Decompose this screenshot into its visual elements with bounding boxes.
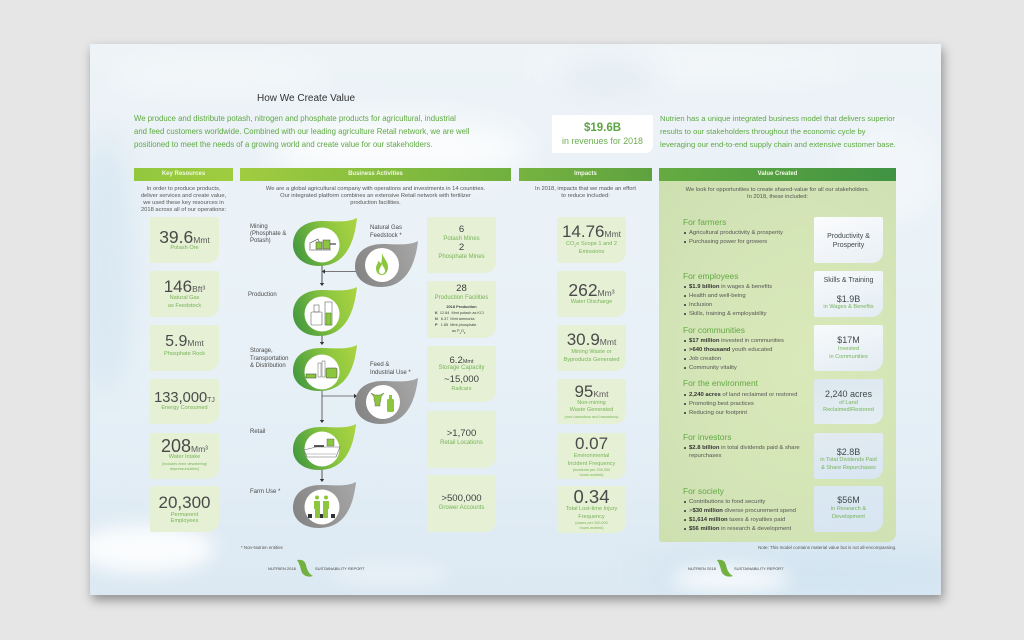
arrow: storage to retail (320, 390, 324, 423)
bullets: employees: Skills, training & employability (689, 311, 767, 317)
footer left leaf (297, 560, 313, 577)
value card: communities: Invested (838, 346, 859, 352)
leaf: feed and industrial use (355, 378, 418, 424)
stat: water discharge: Water Discharge (571, 299, 612, 305)
title: How We Create Value (257, 93, 355, 104)
stat: environmental incident frequency: (incidents per 200,000 (573, 468, 610, 472)
bullets: society: $56 million in research & development (689, 526, 791, 532)
stat: employees: Permanent (171, 512, 198, 518)
stat: injury frequency: (cases per 200,000 (575, 521, 608, 525)
heading: key resources: Key Resources (162, 171, 205, 177)
intro text left: and feed customers worldwide. Combined with our leading agriculture Retail network, we are well (134, 127, 469, 136)
heading: impacts: Impacts (574, 171, 597, 177)
value card: land: 2,240 acres (825, 389, 872, 399)
bullets: communities: Job creation (689, 356, 721, 362)
bullets: society: Contributions to food security (689, 499, 765, 505)
stat: water intake: 208Mm³ (161, 436, 208, 456)
value card: productivity: Productivity & (827, 233, 870, 240)
value card: research: Development (832, 514, 865, 520)
value card: skills and training (814, 271, 883, 317)
stat: storage and railcars (427, 346, 496, 402)
bullets: farmers: Agricultural productivity & prosperity (689, 230, 783, 236)
label: mining (250, 224, 286, 244)
value card: research: in Research & (831, 506, 866, 512)
arrow: mining to production (320, 262, 324, 286)
label: natural gas feedstock: Natural Gas (370, 225, 402, 231)
arrow: natural gas to mining line (322, 269, 358, 274)
value chain flow diagram (293, 218, 418, 528)
value card: land: Reclaimed/Restored (823, 407, 874, 413)
stat: non-mining waste: (non-hazardous and hazardous) (564, 415, 619, 419)
stat: employees (150, 486, 219, 532)
stat: water intake: (includes mine dewatering/ (162, 462, 207, 466)
stat: non-mining waste: Waste Generated (570, 407, 613, 413)
stat: natural gas: Natural Gas (170, 295, 199, 301)
label: storage, transportation and distribution: & Distribution (250, 363, 286, 369)
production breakdown: as P 2O 5 (452, 329, 465, 335)
arrow: storage to feed and industrial use (322, 394, 357, 398)
impacts intro (535, 186, 636, 199)
value card: dividends (814, 433, 883, 479)
production breakdown: N 6.37 Mmt ammonia (435, 317, 474, 321)
stat: water intake: depressurization) (170, 467, 199, 471)
note: model disclaimer: Note: This model contains material value but is not all-encompassing. (758, 545, 896, 550)
stat: grower accounts: >500,000 (441, 493, 482, 504)
label: mining: Mining (250, 224, 268, 230)
label: retail: Retail (250, 429, 265, 435)
stat: mining waste: 30.9Mmt (567, 330, 616, 349)
revenue callout (552, 115, 653, 153)
business activities intro: Our integrated platform combines an extensive Retail network with fertilizer (280, 193, 471, 199)
intro text right: leveraging our end-to-end supply chain and extensive customer base. (660, 140, 896, 149)
heading: for society: For society (683, 486, 724, 496)
bullets: society: >$30 million diverse procurement spend (689, 508, 796, 514)
stat: grower accounts: Grower Accounts (439, 505, 484, 511)
heading: key resources (134, 168, 233, 181)
label: feed and industrial use: Feed & (370, 362, 389, 368)
bullets: communities: Community vitality (689, 365, 737, 371)
key resources intro: In order to produce products, (147, 186, 220, 192)
stat: mines: 6 (459, 224, 464, 235)
stat: storage and railcars: Storage Capacity (438, 365, 485, 371)
stat: injury frequency: hours worked) (579, 526, 604, 530)
leaf: mining (293, 218, 357, 266)
stat: mines: 2 (459, 242, 464, 253)
stat: environmental incident frequency (557, 433, 626, 479)
label: natural gas feedstock (370, 224, 402, 238)
stat: environmental incident frequency: Incident Frequency (568, 461, 615, 467)
production breakdown: K 12.84 Mmt potash as KCl (435, 311, 484, 315)
stat: storage and railcars: 6.2Mmt (449, 355, 474, 366)
label: storage, transportation and distribution: Transportation (250, 356, 288, 362)
stat: injury frequency: 0.34 (573, 486, 610, 507)
value card: skills and training: $1.9B (837, 294, 860, 304)
footer left (268, 560, 365, 577)
bullets: communities: $17 million invested in communities (689, 338, 784, 344)
stat: storage and railcars: Railcars (451, 386, 472, 392)
footnote: non-nutrien entities: * Non-Nutrien entities (241, 545, 283, 550)
key resources intro: deliver services and create value, (141, 193, 226, 199)
value card: research (814, 486, 883, 532)
bullets: communities (684, 338, 784, 371)
value card: communities: $17M (837, 335, 860, 345)
intro text right: results to our stakeholders throughout the economic cycle by (660, 127, 866, 136)
stat: emissions: CO2e Scope 1 and 2 (566, 241, 617, 248)
production breakdown: P 1.85 Mmt phosphate (435, 323, 476, 327)
value card: land (814, 379, 883, 424)
bullets: investors: $2.8 billion in total dividends paid & share (689, 445, 800, 451)
intro text right (660, 114, 896, 149)
footer left report name: SUSTAINABILITY REPORT (315, 566, 365, 571)
value card: communities (814, 325, 883, 371)
value card: dividends: & Share Repurchases (821, 465, 876, 471)
label: feed and industrial use: Industrial Use * (370, 370, 411, 376)
stat: production facilities (427, 281, 496, 338)
label: farm use: Farm Use * (250, 489, 280, 495)
key resources intro: 2018 across all of our operations: (141, 207, 226, 213)
value card: skills and training: in Wages & Benefits (823, 304, 874, 310)
stat: environmental incident frequency: 0.07 (575, 434, 608, 453)
value created intro: In 2018, these included: (747, 194, 808, 200)
heading: value created (659, 168, 896, 181)
key resources intro (141, 186, 226, 213)
value card: communities: in Communities (829, 354, 868, 360)
label: mining: (Phosphate & (250, 231, 286, 237)
arrow: retail to farm use (320, 468, 324, 482)
heading: business activities: Business Activities (348, 171, 403, 177)
stat: potash ore: 39.6Mmt (159, 227, 210, 247)
intro text left (134, 114, 469, 149)
footer right leaf (717, 560, 733, 577)
stat: injury frequency (557, 486, 626, 533)
stat: potash ore (150, 217, 219, 263)
stat: employees: Employees (171, 518, 198, 524)
business activities intro: production facilities. (350, 200, 401, 206)
intro text left: We produce and distribute potash, nitrogen and phosphate products for agricultural, industrial (134, 114, 456, 123)
stat: mining waste (557, 325, 626, 371)
stat: phosphate rock: Phosphate Rock (164, 351, 205, 357)
stat: employees: 20,300 (158, 493, 210, 512)
bullets: farmers: Purchasing power for growers (689, 239, 767, 245)
stat: environmental incident frequency: hours worked) (579, 473, 604, 477)
business activities intro: We are a global agricultural company with operations and investments in 14 countries. (266, 186, 485, 192)
stat: mining waste: Mining Waste or (571, 349, 612, 355)
value card: land: of Land (839, 400, 858, 406)
heading: for farmers: For farmers (683, 217, 726, 227)
stat: energy: 133,000TJ (154, 390, 215, 406)
bullets: farmers (684, 230, 783, 245)
footer right label: NUTRIEN 2018 (688, 566, 716, 571)
page background sheet (90, 44, 941, 595)
stat: phosphate rock: 5.9Mmt (165, 333, 204, 350)
stat: storage and railcars: ~15,000 (444, 374, 479, 385)
leaf: production (293, 287, 357, 336)
heading: for communities: For communities (683, 325, 745, 335)
stat: injury frequency: Frequency (578, 514, 605, 520)
label: natural gas feedstock: Feedstock * (370, 232, 402, 238)
heading: for the environment: For the environment (683, 378, 758, 388)
arrow: production to storage (320, 334, 324, 345)
stat: non-mining waste: 95Kmt (574, 382, 609, 401)
stat: grower accounts (427, 475, 496, 532)
production breakdown (435, 311, 484, 335)
impacts intro: to reduce included: (561, 193, 610, 199)
stat: emissions: 14.76Mmt (562, 222, 621, 241)
stat: energy (150, 379, 219, 424)
business activities intro (266, 186, 485, 206)
label: storage, transportation and distribution: Storage, (250, 348, 273, 354)
heading: impacts (519, 168, 652, 181)
label: mining: Potash) (250, 238, 271, 244)
bullets: employees: $1.9 billion in wages & benefits (689, 284, 772, 290)
stat: natural gas: as Feedstock (168, 303, 201, 309)
value created intro (686, 187, 869, 200)
value card: skills and training: Skills & Training (824, 277, 873, 284)
leaf: farm use (293, 482, 356, 528)
label: feed and industrial use (370, 362, 411, 376)
stat: mines: Phosphate Mines (438, 254, 485, 260)
stat: natural gas (150, 271, 219, 317)
stat: mines: Potash Mines (443, 236, 480, 242)
bullets: investors: repurchases (689, 453, 721, 459)
stat: production facilities: 2018 Production (446, 304, 477, 309)
leaf: natural gas feedstock (355, 241, 418, 287)
panel: value created (659, 181, 896, 542)
bullets: employees: Inclusion (689, 302, 712, 308)
bullets: investors (684, 445, 800, 459)
bullets: environment: Reducing our footprint (689, 410, 747, 416)
bullets: employees (684, 284, 772, 317)
value card: dividends: in Total Dividends Paid (820, 457, 877, 463)
stat: natural gas: 146Bft³ (164, 277, 205, 296)
bullets: environment: 2,240 acres of land reclaimed or restored (689, 392, 797, 398)
stat: water intake: Water Intake (169, 454, 200, 460)
revenue caption: in revenues for 2018 (562, 136, 643, 146)
stat: energy: Energy Consumed (161, 405, 208, 411)
stat: injury frequency: Total Lost-time Injury (566, 506, 617, 512)
stat: water discharge: 262Mm³ (568, 280, 615, 300)
intro text right: Nutrien has a unique integrated business model that delivers superior (660, 114, 895, 123)
bullets: environment: Promoting best practices (689, 401, 754, 407)
heading: for investors: For investors (683, 432, 731, 442)
heading: for employees: For employees (683, 271, 738, 281)
heading: business activities (240, 168, 511, 181)
stat: environmental incident frequency: Environmental (574, 453, 609, 459)
stat: non-mining waste (557, 379, 626, 424)
value card: dividends: $2.8B (837, 447, 860, 457)
revenue value: $19.6B (584, 122, 621, 134)
leaf: retail (293, 424, 356, 470)
stat: emissions (557, 217, 626, 263)
stat: non-mining waste: Non-mining (577, 400, 606, 406)
value card: productivity: Prosperity (833, 242, 864, 249)
bullets: society: $1,614 million taxes & royalties paid (689, 517, 785, 523)
footer right report name: SUSTAINABILITY REPORT (734, 566, 784, 571)
heading: value created: Value Created (758, 171, 797, 177)
bullets: employees: Health and well-being (689, 293, 746, 299)
leaf: storage, transportation and distribution (293, 345, 357, 391)
stat: retail locations (427, 411, 496, 468)
bullets: communities: >640 thousand youth educated (689, 347, 772, 353)
key resources intro: we used these key resources in (143, 200, 224, 206)
footer left label: NUTRIEN 2018 (268, 566, 296, 571)
stat: water discharge (557, 271, 626, 317)
impacts intro: In 2018, impacts that we made an effort (535, 186, 636, 192)
stat: water intake (150, 433, 219, 479)
stat: production facilities: 28 (456, 283, 467, 294)
label: production: Production (248, 292, 277, 298)
stat: phosphate rock (150, 325, 219, 371)
stat: emissions: Emissions (579, 249, 604, 255)
value card: productivity (814, 217, 883, 263)
footer right (688, 560, 784, 577)
stat: potash ore: Potash Ore (170, 245, 199, 251)
stat: retail locations: Retail Locations (440, 440, 483, 446)
stat: mines (427, 217, 496, 273)
stat: production facilities: Production Facilities (435, 295, 488, 301)
value created intro: We look for opportunities to create shared-value for all our stakeholders. (686, 187, 869, 193)
stat: mining waste: Byproducts Generated (564, 357, 619, 363)
bullets: environment (684, 392, 797, 416)
label: storage, transportation and distribution (250, 348, 288, 369)
stat: retail locations: >1,700 (447, 428, 476, 439)
bullets: society (684, 499, 796, 532)
value card: research: $56M (837, 495, 860, 505)
intro text left: positioned to meet the needs of a growing world and create value for our stakeholders. (134, 140, 433, 149)
